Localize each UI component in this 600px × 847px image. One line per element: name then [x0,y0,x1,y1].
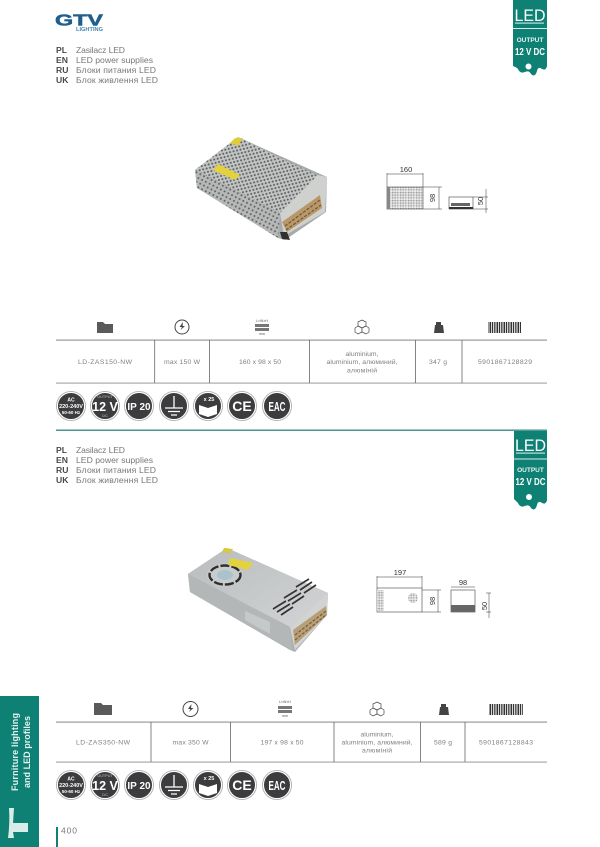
spec table: first product: aluminium, [346,351,379,358]
badge: AC 220-240V: 220-240V [59,783,83,789]
spec table: second product: 197 x 98 x 50 [260,740,304,746]
badge: AC 220-240V: AC [67,398,75,404]
badge: output 12 V DC: 12 V [92,779,119,793]
product names: first product: Блок живлення LED [76,75,158,85]
badge: earth symbol [160,392,188,420]
badge: AC 220-240V: 50-60 Hz [62,789,81,794]
tab: LED output 12 V DC, first product: OUTPUT [517,37,543,44]
icon: folder [97,322,113,333]
product names: first product [56,45,158,85]
dimension drawing: 197 x 98 x 50: 98 [428,597,437,605]
icon: dimensions L-W-H: mm [282,714,288,718]
spec table: second product: max 350 W [172,740,209,746]
badge: CE: CE [232,777,252,793]
badge: AC 220-240V: 50-60 Hz [62,410,81,415]
spec table: second product: 589 g [434,740,452,746]
tab: LED output 12 V DC, first product: LED [514,6,546,25]
product photo: LD-ZAS350-NW [188,548,328,652]
product names: second product: RU [56,465,68,475]
icon: barcode [488,322,521,333]
product names: first product: EN [56,55,68,65]
spec table: second product: 5901867128843 [479,740,533,746]
badge: output 12 V DC: DC [102,792,108,797]
section divider [56,430,547,431]
badge: AC 220-240V: AC [67,776,75,782]
icon: dimensions L-W-H [278,700,292,718]
badge: EAC [262,770,292,800]
logo: GTV Lighting: GTV [55,12,104,30]
spec table: first product: алюміній [347,366,377,374]
tab: LED output 12 V DC, second product: 12 V DC [516,477,546,488]
logo: GTV Lighting [55,12,104,33]
product names: second product: Блок живлення LED [76,475,158,485]
product photo: LD-ZAS150-NW [195,137,327,240]
badge: output 12 V DC: OUTPUT [97,774,113,778]
badge: earth symbol [160,770,188,800]
icon: material cubes [370,702,384,716]
badge: EAC: EAC [268,399,286,414]
badge: IP20 [124,770,154,800]
icon: dimensions L-W-H: mm [259,332,265,336]
dimension drawing: 160 x 98 x 50 [387,165,488,213]
badge: IP20: IP 20 [127,402,151,413]
dimension drawing: 197 x 98 x 50 [377,568,491,618]
icon: power max [175,320,189,334]
badge: IP20 [124,392,154,420]
icon: dimensions L-W-H [255,319,269,336]
badge: output 12 V DC [90,392,120,420]
badge: AC 220-240V: 220-240V [59,404,83,410]
badge: EAC: EAC [268,778,286,793]
spec table: first product [56,340,547,384]
tab: LED output 12 V DC, second product: OUTPUT [517,467,544,474]
product names: second product [56,445,158,485]
icon row: second product [94,700,523,718]
badge: CE: CE [232,398,252,414]
spec table: first product: LD-ZAS150-NW [78,359,133,366]
spec table: first product: 347 g [429,359,447,366]
icon row: first product [97,319,521,336]
dimension drawing: 160 x 98 x 50: 98 [428,194,437,202]
product names: second product: EN [56,455,68,465]
badge: AC 220-240V [56,770,86,800]
spec table: second product: aluminium, [360,732,394,738]
certification badges: first product [56,392,292,420]
badge: IP20: IP 20 [127,781,151,792]
product names: first product: Блоки питания LED [76,65,156,75]
dimension drawing: 197 x 98 x 50: 50 [480,602,489,610]
spec table: second product: алюміній [362,746,392,754]
badge: output 12 V DC: DC [102,413,108,418]
icon: weight [439,704,449,715]
product names: first product: LED power supplies [76,55,153,65]
product names: first product: PL [56,45,67,55]
product names: second product: PL [56,445,67,455]
tab: LED output 12 V DC, first product: 12 V DC [515,47,545,58]
badge: x25 box: x 25 [204,397,214,403]
badge: output 12 V DC: OUTPUT [97,395,113,399]
badge: AC 220-240V [56,392,86,420]
spec table: second product: aluminium, алюминий, [342,738,413,746]
spec table: second product [56,722,547,763]
product names: second product: Zasilacz LED [76,445,125,455]
product names: second product: UK [56,475,69,485]
icon: dimensions L-W-H: L×W×H [279,700,291,704]
tab: LED output 12 V DC, first product [513,0,547,75]
product names: second product: LED power supplies [76,455,153,465]
badge: CE [228,392,256,420]
tab: LED output 12 V DC, second product: LED [515,436,546,455]
product names: first product: UK [56,75,69,85]
spec table: first product: 5901867128829 [478,359,532,366]
icon: power max [183,702,198,716]
badge: output 12 V DC: 12 V [92,400,119,414]
page number: 400 [61,826,77,836]
page number [56,826,77,847]
certification badges: second product [56,770,292,800]
spec table: first product: 160 x 98 x 50 [239,359,281,366]
icon: material cubes [355,320,369,334]
product names: second product: Блоки питания LED [76,465,156,475]
sidebar heading: Furniture lighting [10,713,20,791]
icon: weight [434,322,444,333]
product names: first product: RU [56,65,68,75]
tab: LED output 12 V DC, second product [514,431,547,509]
badge: x25 box [194,770,222,800]
badge: x25 box [194,392,222,420]
spec table: second product: LD-ZAS350-NW [76,740,131,746]
logo: GTV Lighting: LIGHTING [76,27,103,33]
icon: profile T [8,808,28,838]
icon: dimensions L-W-H: L×W×H [256,319,268,323]
dimension drawing: 197 x 98 x 50: 98 [459,578,467,587]
badge: output 12 V DC [90,770,120,800]
sidebar heading: and LED profiles [22,716,32,788]
spec table: first product: aluminium, алюминий, [326,358,398,366]
badge: CE [228,770,256,800]
dimension drawing: 160 x 98 x 50: 50 [476,197,485,205]
dimension drawing: 160 x 98 x 50: 160 [400,165,412,174]
icon: barcode [489,704,523,715]
badge: x25 box: x 25 [204,776,214,782]
product names: first product: Zasilacz LED [76,45,125,55]
dimension drawing: 197 x 98 x 50: 197 [394,568,406,577]
sidebar: chapter tab [0,696,39,847]
spec table: first product: max 150 W [164,359,201,366]
icon: folder [94,703,112,715]
badge: EAC [262,392,292,420]
sidebar heading [10,713,32,791]
